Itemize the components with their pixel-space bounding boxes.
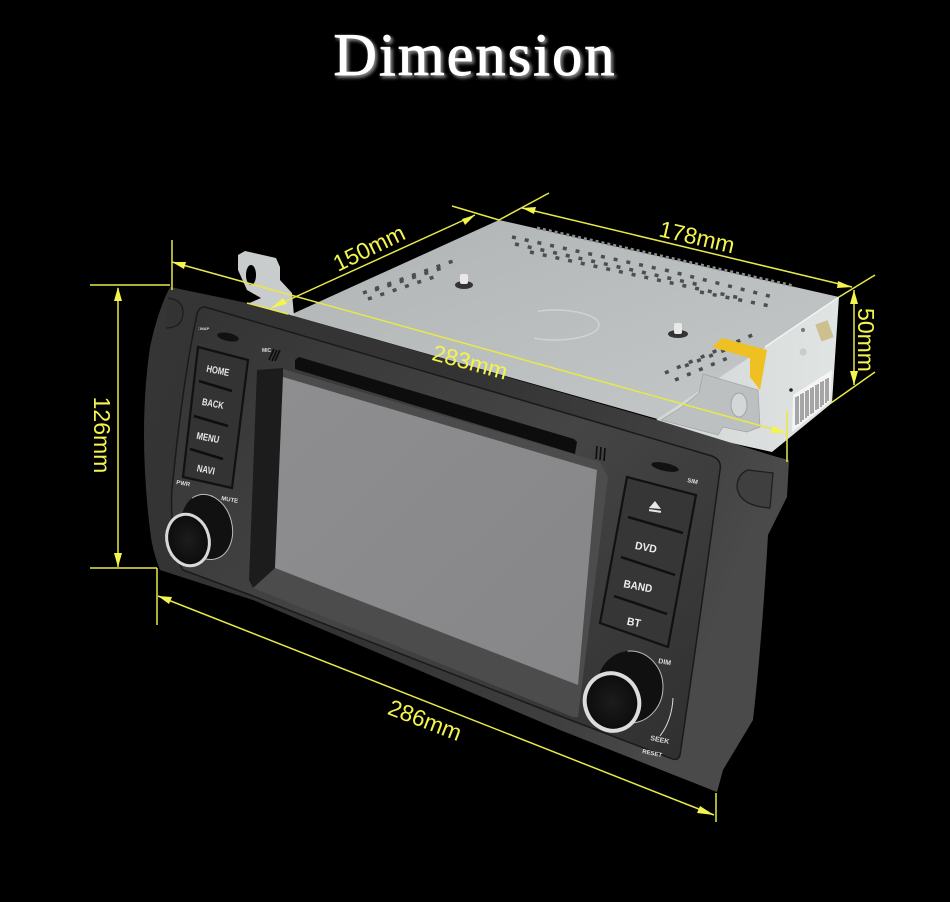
small panel labels: RESET [642, 749, 663, 759]
right clip recess [737, 470, 773, 508]
vent holes right [596, 446, 605, 461]
dimension: 286mm: 286mm [385, 694, 465, 746]
barcode sticker [792, 370, 832, 432]
left button block: MENU [195, 431, 220, 446]
dimension: 50mm: 50mm [853, 308, 879, 372]
left clip recess [166, 298, 183, 328]
warning label [712, 338, 767, 390]
dimension: 283mm [172, 240, 787, 462]
screen [275, 377, 597, 685]
head unit body [144, 287, 789, 792]
icon: screw right [668, 323, 688, 338]
small panel labels: □MAP [198, 326, 210, 331]
dimension: 126mm: 126mm [89, 397, 115, 473]
small panel labels: DIM [658, 658, 672, 667]
right button block: BAND [622, 578, 653, 596]
unit metal box [290, 220, 839, 452]
disc slot [295, 357, 577, 454]
small panel labels: SIM [687, 478, 698, 486]
dimension: 283mm: 283mm [430, 340, 510, 384]
dimension: 286mm [157, 568, 716, 822]
dimension: 150mm [247, 193, 549, 314]
dimension: 126mm [89, 285, 170, 568]
left button block: NAVI [196, 463, 216, 478]
dimension: 178mm: 178mm [657, 216, 737, 258]
right mounting bracket [661, 374, 760, 435]
small panel labels: MIC [262, 348, 272, 354]
left mounting bracket [238, 251, 294, 316]
mic holes [269, 349, 280, 361]
small panel labels: SEEK [650, 735, 670, 746]
left button block [183, 347, 248, 488]
right knob [577, 651, 663, 738]
dimension: 178mm [522, 207, 852, 288]
sd slot left [216, 331, 240, 343]
right button block: BT [626, 616, 642, 630]
left knob [161, 489, 240, 571]
sd slot right [650, 460, 680, 474]
left button block: BACK [201, 397, 225, 412]
dimension: 150mm: 150mm [329, 220, 409, 276]
dimension: 50mm [831, 275, 879, 403]
small panel labels: MUTE [221, 496, 238, 505]
icon: screw left [455, 274, 473, 289]
small panel labels: PWR [176, 480, 191, 489]
left button block: HOME [205, 364, 230, 379]
inner control panel [172, 307, 720, 759]
screen bezel [249, 368, 608, 717]
title: Dimension [335, 24, 619, 90]
small panel labels [176, 326, 698, 759]
right button block: DVD [634, 540, 658, 556]
right button block [600, 477, 696, 647]
title: Dimension [333, 22, 617, 88]
side bracket details [789, 320, 834, 392]
